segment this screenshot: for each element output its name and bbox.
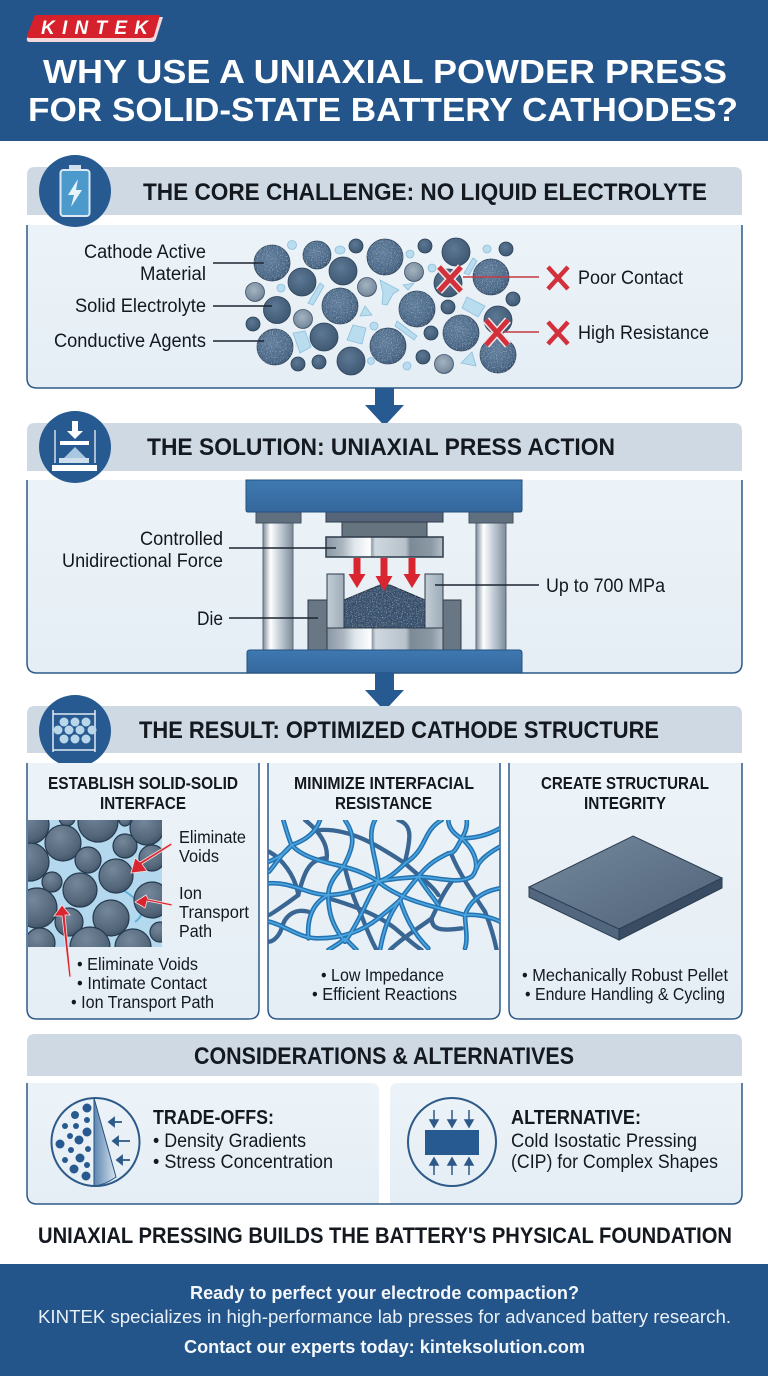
press machine	[246, 480, 522, 673]
trade-offs text: TRADE-OFFS:	[153, 1107, 274, 1129]
conductive network	[269, 820, 500, 950]
section heading: considerations and alternatives: CONSIDERATIONS & ALTERNATIVES	[194, 1043, 574, 1070]
label: controlled unidirectional force: Controlled	[140, 529, 223, 550]
callout labels: Path	[179, 921, 212, 941]
callout: high resistance: High Resistance	[578, 323, 709, 344]
bullet list	[312, 965, 457, 1004]
label: solid electrolyte: Solid Electrolyte	[75, 296, 206, 317]
card: establish solid-solid interface	[11, 763, 259, 1019]
bullet list: • Low Impedance	[321, 965, 444, 985]
bullet list: • Endure Handling & Cycling	[525, 984, 725, 1004]
panel: uniaxial press	[27, 480, 742, 673]
card: create structural integrity	[509, 763, 742, 1019]
label: cathode active material: Cathode Active	[84, 242, 206, 263]
bullet list: • Ion Transport Path	[71, 992, 214, 1012]
arrow: challenge to solution	[365, 388, 404, 426]
footer text	[38, 1283, 731, 1357]
card heading	[541, 773, 709, 813]
trade-offs text	[153, 1107, 333, 1173]
red callout arrows	[54, 843, 172, 977]
callout labels: Voids	[179, 846, 219, 866]
title	[28, 53, 738, 128]
footer band	[0, 1264, 768, 1376]
trade-offs text: • Density Gradients	[153, 1131, 306, 1152]
logo: KINTEK: KINTEK	[41, 18, 149, 39]
trade-offs text: • Stress Concentration	[153, 1152, 333, 1173]
footer text: Contact our experts today: kinteksolution.com	[184, 1337, 585, 1357]
bullet list: • Eliminate Voids	[77, 954, 198, 974]
label: up to 700 MPa: Up to 700 MPa	[546, 576, 665, 597]
card heading: RESISTANCE	[335, 793, 432, 813]
callout: poor contact	[439, 267, 684, 291]
icon: press	[39, 411, 111, 483]
section heading: the solution	[27, 423, 742, 471]
arrow: solution to result	[365, 673, 404, 711]
bullet list: • Intimate Contact	[77, 973, 207, 993]
callout: poor contact: Poor Contact	[578, 268, 684, 289]
panel: trade-offs	[27, 1083, 379, 1204]
callout labels	[179, 827, 249, 941]
label: die	[197, 609, 318, 630]
panel: alternative	[379, 1083, 742, 1204]
bullet list	[522, 965, 728, 1004]
icon: cathode structure	[39, 695, 111, 767]
label: cathode active material	[84, 242, 264, 285]
section heading: the core challenge	[27, 167, 742, 215]
label: controlled unidirectional force	[62, 529, 336, 572]
card heading	[48, 773, 238, 813]
section heading: the core challenge: THE CORE CHALLENGE: NO LIQUID ELECTROLYTE	[143, 179, 707, 206]
compacted particle image	[28, 820, 162, 947]
title: FOR SOLID-STATE BATTERY CATHODES?	[28, 91, 738, 128]
callout labels: Ion	[179, 883, 202, 903]
card heading	[294, 773, 474, 813]
footer text: KINTEK specializes in high-performance lab presses for advanced battery research.	[38, 1307, 731, 1327]
bullet list: • Efficient Reactions	[312, 984, 457, 1004]
icon: isostatic pressing	[408, 1098, 496, 1186]
card heading: MINIMIZE INTERFACIAL	[294, 773, 474, 793]
section heading: considerations and alternatives	[27, 1034, 742, 1076]
card heading: INTEGRITY	[584, 793, 666, 813]
label: cathode active material: Material	[140, 264, 206, 285]
callout labels: Eliminate	[179, 827, 246, 847]
logo: KINTEK	[27, 15, 163, 42]
header band	[0, 0, 768, 141]
section heading: the solution: THE SOLUTION: UNIAXIAL PRESS ACTION	[147, 434, 615, 461]
card heading: ESTABLISH SOLID-SOLID	[48, 773, 238, 793]
label: controlled unidirectional force: Unidirectional Force	[62, 551, 223, 572]
alternative text: Cold Isostatic Pressing	[511, 1131, 697, 1152]
force arrows	[348, 558, 420, 591]
title: WHY USE A UNIAXIAL POWDER PRESS	[43, 53, 727, 90]
card heading: INTERFACE	[100, 793, 186, 813]
icon: density gradient	[52, 1098, 140, 1186]
card heading: CREATE STRUCTURAL	[541, 773, 709, 793]
footer text: Ready to perfect your electrode compaction?	[190, 1283, 579, 1303]
label: conductive agents: Conductive Agents	[54, 331, 206, 352]
particle mixture	[246, 238, 520, 375]
section heading: the result: THE RESULT: OPTIMIZED CATHODE STRUCTURE	[139, 717, 659, 744]
bullet list	[71, 954, 214, 1012]
alternative text	[511, 1107, 718, 1173]
label: die: Die	[197, 609, 223, 630]
callout: high resistance	[486, 320, 709, 345]
bullet list: • Mechanically Robust Pellet	[522, 965, 728, 985]
alternative text: ALTERNATIVE:	[511, 1107, 641, 1129]
callout labels: Transport	[179, 902, 249, 922]
section heading: the result	[27, 706, 742, 753]
alternative text: (CIP) for Complex Shapes	[511, 1152, 718, 1173]
pellet	[529, 836, 722, 940]
icon: battery	[39, 155, 111, 227]
panel: core challenge	[27, 225, 742, 388]
card: minimize interfacial resistance	[268, 763, 500, 1019]
